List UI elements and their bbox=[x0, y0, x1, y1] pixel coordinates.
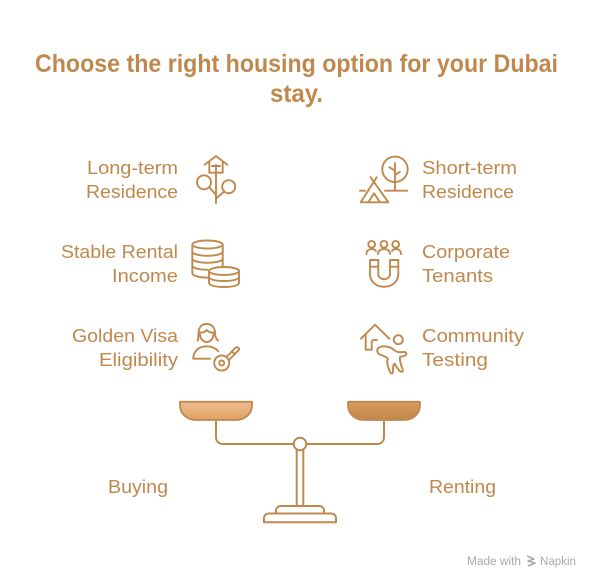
icon: tent and tree bbox=[360, 157, 408, 202]
label: community testing bbox=[422, 325, 525, 370]
label: golden visa eligibility: Eligibility bbox=[99, 349, 179, 370]
label: community testing: Community bbox=[422, 325, 525, 346]
label: renting: Renting bbox=[429, 476, 496, 497]
pivot bbox=[294, 438, 306, 450]
footer: made with napkin: Made with bbox=[467, 556, 521, 568]
label: golden visa eligibility bbox=[72, 325, 179, 370]
footer: made with napkin: Napkin bbox=[540, 556, 576, 568]
label: stable rental income: Stable Rental bbox=[61, 241, 178, 262]
icon: person with key bbox=[193, 324, 239, 370]
icon: house and person bbox=[361, 325, 406, 373]
balance scale bbox=[180, 402, 420, 522]
upper base bbox=[276, 506, 324, 514]
icon: house on branching plant bbox=[197, 156, 235, 203]
post bbox=[297, 449, 303, 506]
left pan: buying bbox=[180, 402, 252, 420]
beam bbox=[216, 421, 384, 444]
title bbox=[35, 50, 558, 108]
title: stay. bbox=[270, 80, 323, 108]
label: stable rental income bbox=[61, 241, 178, 286]
label: corporate tenants: Corporate bbox=[422, 241, 510, 262]
label: corporate tenants: Tenants bbox=[422, 265, 493, 286]
label: long-term residence: Residence bbox=[86, 181, 178, 202]
label: short-term residence: Short-term bbox=[422, 157, 517, 178]
label: short-term residence bbox=[422, 157, 517, 202]
icon: coin stacks bbox=[192, 240, 239, 287]
label: golden visa eligibility: Golden Visa bbox=[72, 325, 179, 346]
icon: people and magnet bbox=[366, 241, 401, 287]
label: long-term residence bbox=[86, 157, 178, 202]
label: stable rental income: Income bbox=[112, 265, 178, 286]
footer: made with napkin bbox=[467, 556, 576, 568]
label: community testing: Testing bbox=[422, 349, 488, 370]
right pan: renting bbox=[348, 402, 420, 420]
label: long-term residence: Long-term bbox=[87, 157, 178, 178]
label: short-term residence: Residence bbox=[422, 181, 514, 202]
label: buying: Buying bbox=[108, 476, 168, 497]
lower base bbox=[264, 514, 336, 522]
title: Choose the right housing option for your Dubai bbox=[35, 50, 558, 78]
label: corporate tenants bbox=[422, 241, 510, 286]
